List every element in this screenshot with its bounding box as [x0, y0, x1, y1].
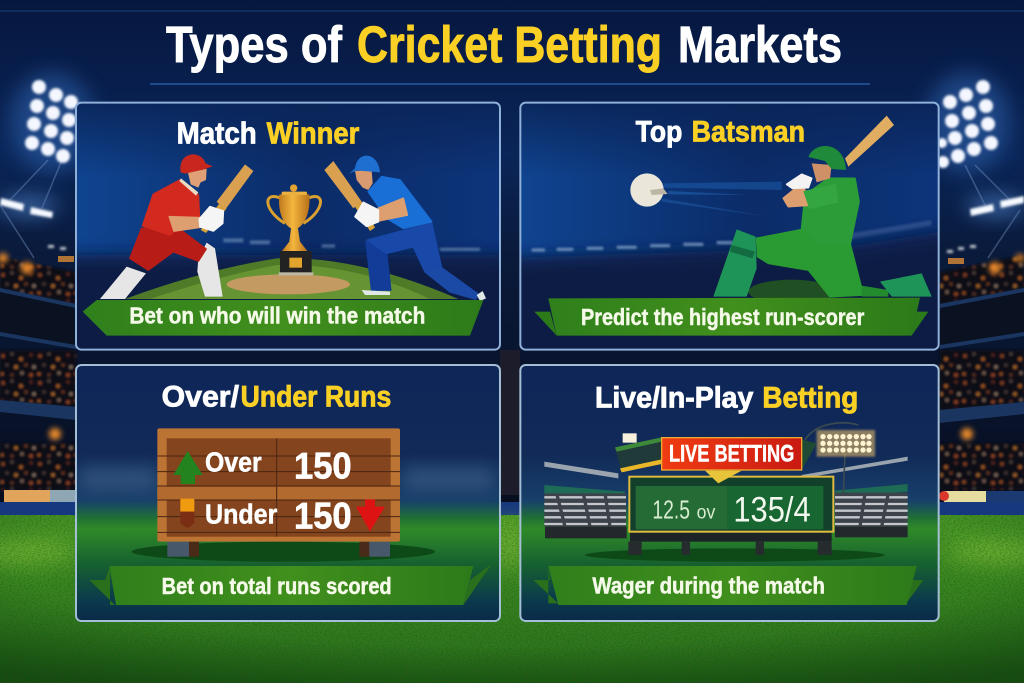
advertising boards	[0, 490, 1024, 515]
wooden sign: Under	[205, 498, 278, 529]
wooden sign: 150	[294, 494, 352, 536]
heading: Live/In-Play	[595, 381, 754, 414]
panel: Over/Under Runs	[76, 365, 500, 621]
pitch mound	[125, 258, 458, 299]
blurred crowd	[80, 467, 493, 490]
scoreboard: 135/4	[733, 491, 811, 530]
title heading	[0, 11, 1024, 84]
scoreboard: 12.5	[652, 494, 690, 524]
ribbon	[89, 564, 492, 605]
panel background	[520, 103, 939, 350]
ribbon	[83, 300, 483, 336]
heading: Top	[636, 116, 682, 149]
light bars	[0, 196, 1024, 218]
heading: Batsman	[692, 116, 805, 149]
panel border	[520, 365, 939, 621]
title heading: Types of	[166, 16, 343, 73]
panel scenery	[77, 104, 499, 349]
heading: Over/	[162, 381, 240, 414]
floodlight left	[0, 72, 94, 258]
wooden sign: 150	[294, 444, 352, 486]
heading: Betting	[762, 381, 858, 414]
panel: Live/In-Play Betting	[520, 365, 939, 621]
cricket ball	[630, 173, 782, 217]
ribbon	[533, 566, 923, 605]
scoreboard	[628, 477, 833, 555]
red batsman	[100, 154, 253, 299]
mini stadium	[544, 457, 908, 562]
panel border	[76, 103, 500, 350]
live betting sign: LIVE BETTING	[669, 441, 794, 468]
panel background	[520, 365, 939, 621]
wooden sign	[132, 428, 435, 562]
grass field	[0, 515, 1024, 683]
green batsman	[713, 116, 932, 304]
live betting sign	[615, 437, 817, 483]
panel border	[76, 365, 500, 621]
heading: Winner	[267, 116, 359, 150]
panel background	[76, 365, 500, 621]
ribbon: Bet on who will win the match	[129, 303, 425, 329]
right floodlight	[805, 423, 875, 493]
left floodlight	[623, 433, 637, 443]
scoreboard: ov	[697, 502, 716, 523]
title heading: Markets	[678, 16, 842, 73]
heading	[636, 116, 805, 149]
heading	[177, 116, 359, 150]
panel scenery	[521, 104, 938, 349]
heading	[595, 381, 858, 414]
title heading: Cricket Betting	[357, 16, 662, 73]
trophy	[268, 184, 321, 275]
blue batsman	[324, 156, 486, 301]
heading	[162, 381, 391, 414]
crowd stands	[0, 245, 1024, 495]
wooden sign: Over	[205, 447, 262, 478]
ribbon: Bet on total runs scored	[162, 573, 392, 599]
panel background	[76, 103, 500, 350]
floodlight right	[926, 72, 1020, 258]
ribbon	[534, 298, 928, 336]
ribbon: Predict the highest run-scorer	[581, 304, 864, 330]
ribbon: Wager during the match	[592, 572, 825, 598]
panel border	[520, 103, 939, 350]
heading: Match	[177, 116, 257, 150]
heading: Under Runs	[241, 381, 391, 414]
panel: Match Winner	[75, 102, 501, 351]
panel: Top Batsman	[495, 103, 962, 372]
